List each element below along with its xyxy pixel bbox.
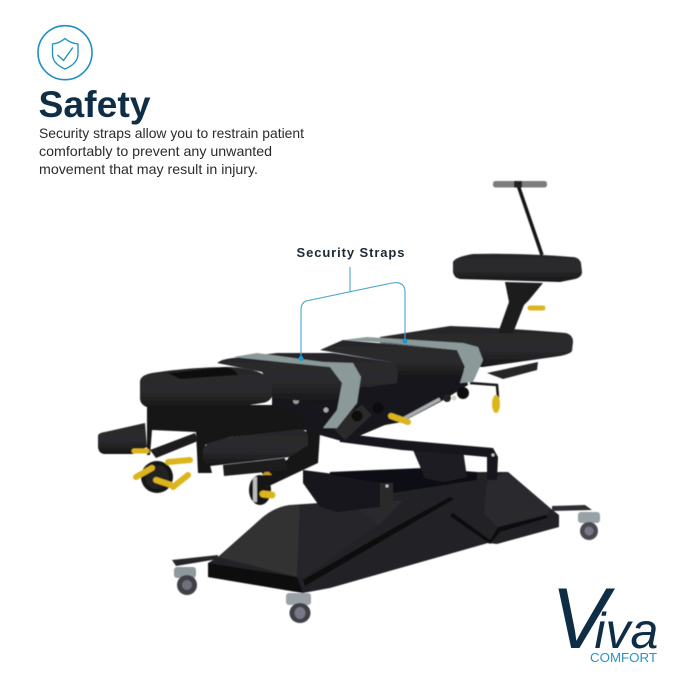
- back rest pad: [453, 254, 582, 282]
- body text: [39, 125, 304, 177]
- head section frame: [141, 405, 305, 493]
- title: Safety: [38, 83, 151, 125]
- logo: COMFORT: [590, 651, 657, 665]
- head pad: [140, 367, 272, 409]
- side pad: left: [98, 423, 147, 454]
- yellow levers: [134, 308, 543, 495]
- lift frame: [303, 433, 498, 512]
- side pad: right: [203, 429, 308, 466]
- caster: front: [286, 593, 311, 623]
- body text: Security straps allow you to restrain patient: [39, 125, 304, 141]
- security strap: right: [343, 337, 483, 383]
- icon: shield in circle: [38, 26, 92, 80]
- caster: right: [552, 505, 600, 540]
- logo: Viva: [551, 571, 658, 667]
- caster: left: [172, 555, 218, 595]
- side bracket and wheel: [223, 430, 320, 505]
- T handle: [493, 181, 547, 255]
- table base: [208, 472, 559, 593]
- callout: security straps: [296, 245, 408, 361]
- middle table pad: [320, 340, 465, 378]
- body text: movement that may result in injury.: [39, 161, 258, 177]
- security strap: left: [233, 353, 361, 428]
- body text: comfortably to prevent any unwanted: [39, 143, 272, 159]
- illustration: adjustable treatment table: [98, 181, 600, 623]
- left table pad: [217, 353, 398, 403]
- under-table mechanism: [272, 362, 538, 442]
- callout: security straps: Security Straps: [296, 245, 404, 260]
- far table pad: [380, 326, 573, 367]
- back rest support post: [498, 282, 543, 333]
